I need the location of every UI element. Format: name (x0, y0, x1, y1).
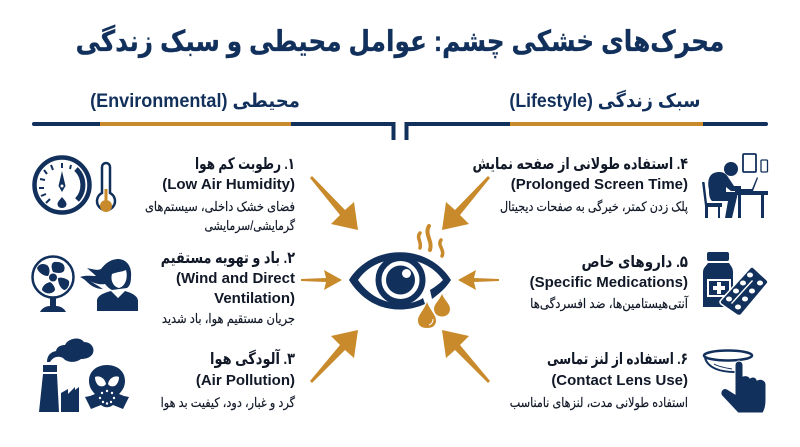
panel: item 5 text: (Specific Medications) (530, 274, 688, 291)
panel: item 6 text: استفاده طولانی مدت، لنزهای نامناسب (510, 395, 688, 410)
panel: item 1 text: فضای خشک داخلی، سیستم‌های (145, 199, 295, 214)
icon: woman with blowing hair (80, 259, 138, 311)
arrow: top-right (442, 176, 490, 230)
arrow: left (301, 270, 342, 290)
panel: item 1 text: گرمایشی/سرمایشی (205, 218, 295, 233)
panel: item 4 text: پلک زدن کمتر، خیرگی به صفحات دیجیتال (500, 199, 688, 214)
panel: item 1 text: (Low Air Humidity) (162, 176, 295, 193)
icon: dry eye (349, 226, 451, 328)
panel: item 1 text: ۱. رطوبت کم هوا (195, 156, 295, 173)
arrow: bottom-left (310, 330, 358, 383)
panel: item 2 text: جریان مستقیم هوا، باد شدید (162, 311, 295, 326)
panel: item 5 text: آنتی‌هیستامین‌ها، ضد افسردگی‌ها (530, 296, 688, 311)
panel: item 1 text (145, 156, 296, 234)
panel: item 3 text: گرد و غبار، دود، کیفیت بد هوا (161, 395, 295, 410)
icon: humidity gauge (34, 158, 115, 212)
panel: item 2 text (161, 250, 295, 326)
panel: item 3 text: ۳. آلودگی هوا (210, 351, 295, 368)
panel: item 5 text (530, 254, 689, 312)
panel: item 2 text: Ventilation) (214, 290, 295, 307)
panel: item 6 text: ۶. استفاده از لنز تماسی (547, 351, 688, 368)
panel: item 6 text: (Contact Lens Use) (551, 372, 688, 389)
panel: item 3 text (161, 348, 296, 410)
panel: item 4 text (472, 156, 688, 214)
heading: environmental: محیطی (Environmental) (90, 91, 300, 112)
panel: item 2 text: ۲. باد و تهویه مستقیم (161, 250, 295, 267)
heading: lifestyle: سبک زندگی (Lifestyle) (509, 91, 701, 112)
arrow: right (458, 270, 499, 290)
arrow: bottom-right (442, 330, 490, 383)
panel: item 4 text: (Prolonged Screen Time) (511, 176, 688, 193)
icon: fan (32, 256, 74, 312)
icon: contact lens and pointing hand (704, 350, 766, 413)
title: محرک‌های خشکی چشم: عوامل محیطی و سبک زندگی (76, 26, 724, 58)
icon: factory with smoke (39, 338, 94, 412)
panel: item 4 text: ۴. استفاده طولانی از صفحه نمایش (472, 156, 688, 173)
panel: item 2 text: (Wind and Direct (176, 270, 295, 287)
arrow: top-left (310, 176, 358, 230)
panel: item 5 text: ۵. داروهای خاص (582, 254, 688, 271)
icon: gas mask (85, 365, 129, 409)
icon: person at laptop with devices (702, 154, 768, 218)
panel: item 3 text: (Air Pollution) (196, 372, 295, 389)
icon: medication bottle and blister pack (703, 252, 768, 316)
panel: item 6 text (510, 351, 688, 410)
